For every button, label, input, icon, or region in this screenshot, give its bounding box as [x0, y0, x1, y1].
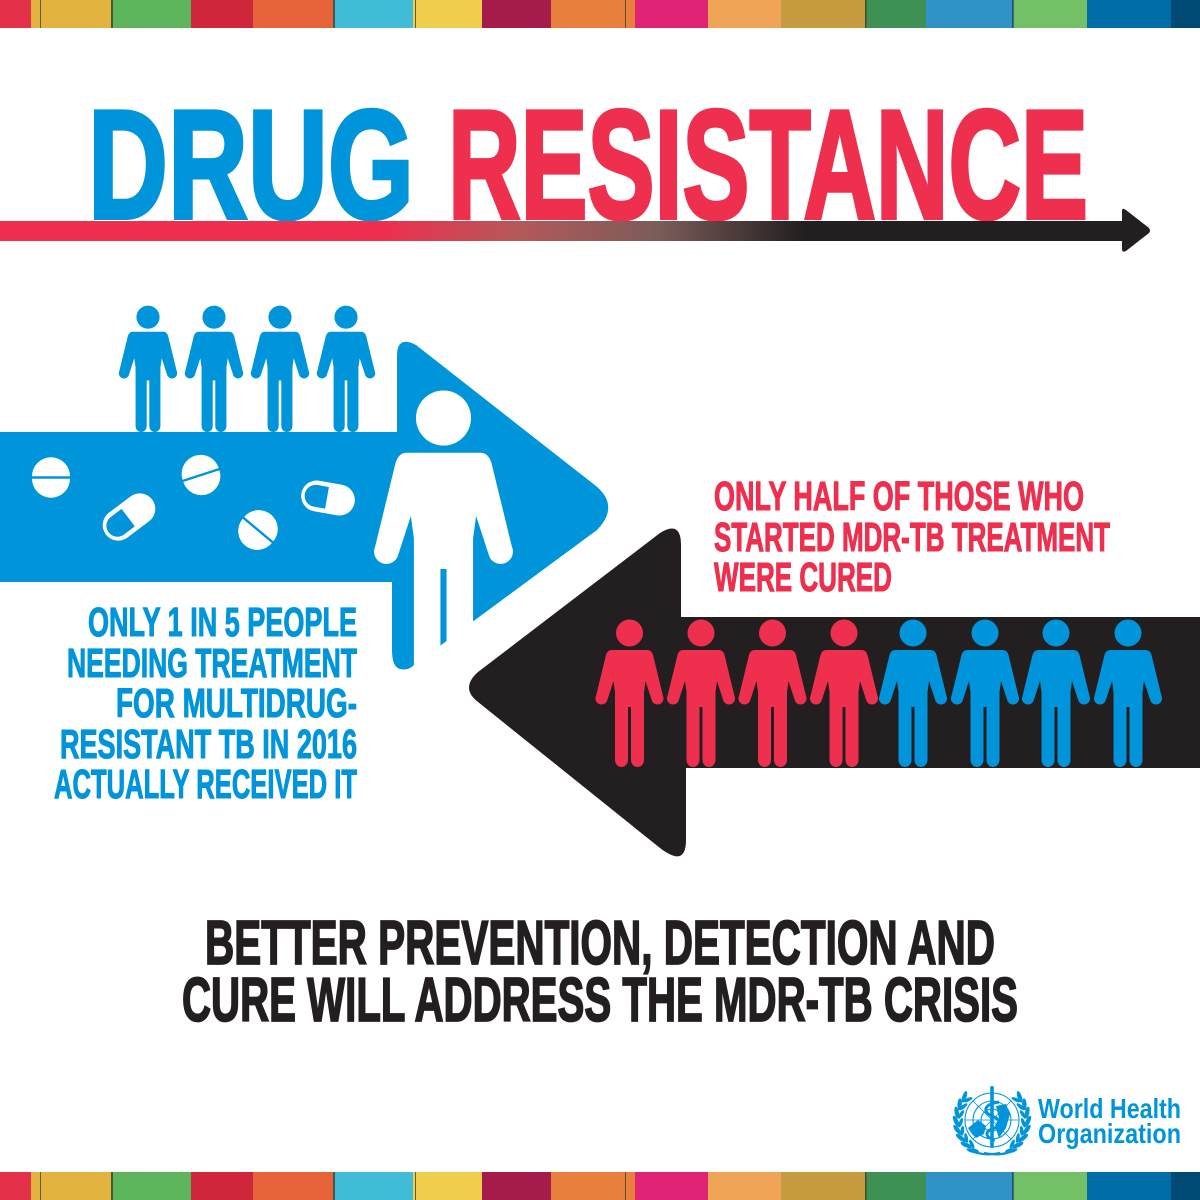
- blue statistic text: ACTUALLY RECEIVED IT: [54, 761, 357, 807]
- WHO logo: [952, 1086, 1181, 1154]
- icon: pill round 3: [230, 502, 286, 558]
- title arrow line: [0, 209, 1150, 252]
- WHO wordmark: [1038, 1093, 1181, 1149]
- blue people on arrow: [119, 306, 375, 432]
- blue statistic text: ONLY 1 IN 5 PEOPLE: [88, 599, 357, 645]
- bottom colour band: [0, 1172, 1200, 1200]
- blue statistic text: [54, 599, 357, 807]
- blue statistic text: NEEDING TREATMENT: [67, 640, 357, 686]
- title: DRUG: [88, 78, 414, 251]
- icon: pill round 2: [177, 450, 225, 500]
- red and blue people on black arrow: [595, 620, 1162, 767]
- icon: capsule 2: [299, 478, 357, 518]
- icon: large white person: [374, 390, 513, 691]
- blue statistic text: RESISTANT TB IN 2016: [60, 721, 357, 767]
- red statistic text: [714, 473, 1110, 600]
- top colour band: [0, 0, 1200, 28]
- icon: WHO emblem: [952, 1086, 1032, 1154]
- black arrow: [469, 529, 1200, 856]
- title: [88, 78, 1088, 251]
- red statistic text: WERE CURED: [714, 554, 892, 600]
- blue arrow with pills and large person: [0, 342, 608, 691]
- icon: capsule 1: [97, 487, 161, 547]
- icon: pill round 1: [32, 457, 70, 498]
- blue statistic text: FOR MULTIDRUG-: [116, 680, 357, 726]
- conclusion text: [182, 909, 1018, 1035]
